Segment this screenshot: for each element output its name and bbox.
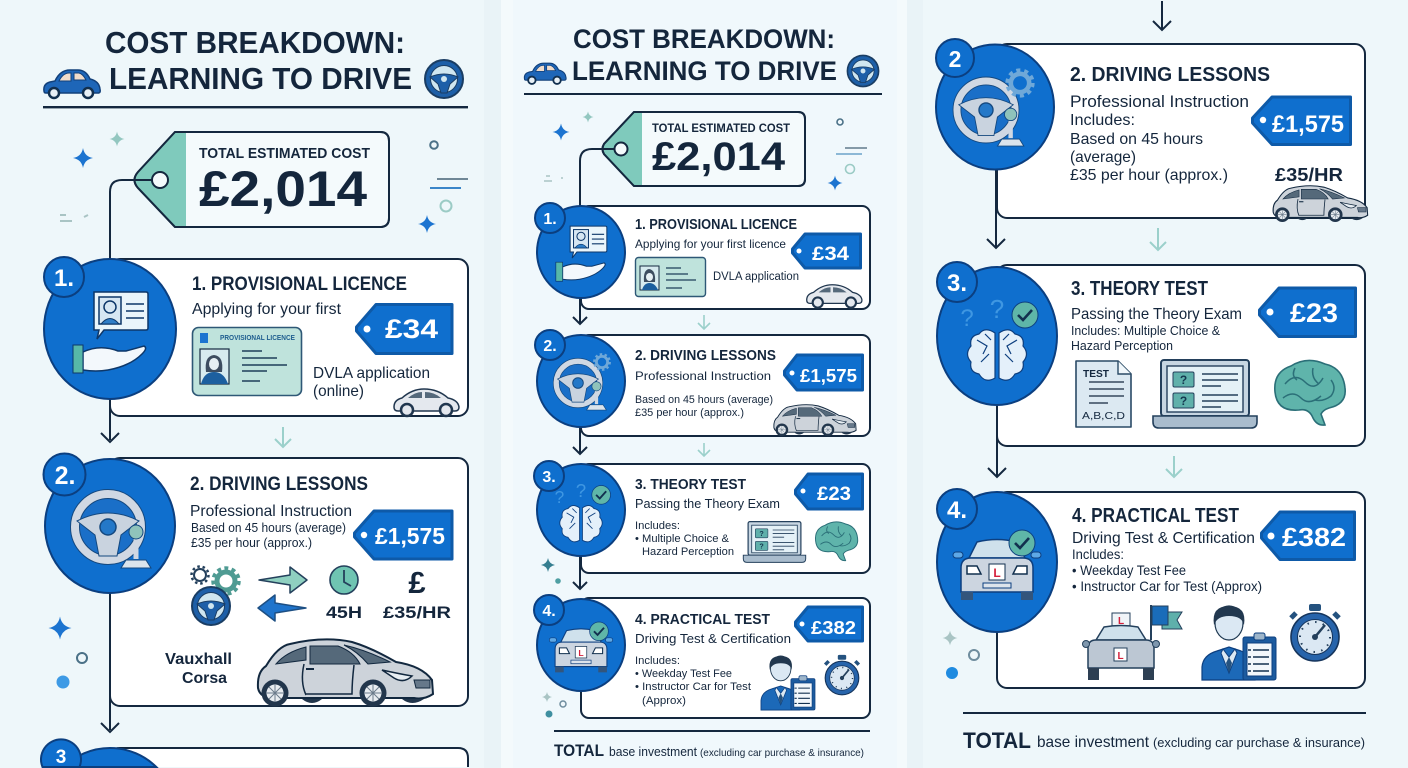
title xyxy=(105,25,412,96)
step 2 text xyxy=(635,369,773,419)
step 4 text: • Instructor Car for Test xyxy=(635,681,751,693)
step 1 heading: 1. PROVISIONAL LICENCE xyxy=(192,274,407,295)
connector arrow xyxy=(1150,228,1166,250)
number badge 1: 1. xyxy=(543,211,557,228)
step 4 text: (Approx) xyxy=(642,695,686,707)
step 3 heading: 3. THEORY TEST xyxy=(635,477,746,493)
step 3 heading: 3. THEORY TEST xyxy=(1071,278,1208,300)
footer total xyxy=(554,741,864,760)
step 3 card xyxy=(937,262,1365,477)
icon: examiner xyxy=(1202,606,1276,680)
step 3 text: Passing the Theory Exam xyxy=(635,497,780,511)
total cost tag: TOTAL ESTIMATED COST xyxy=(652,121,791,135)
step 2 price tag xyxy=(784,355,862,390)
connector arrow xyxy=(1166,456,1182,477)
step 1 card: provisional licence xyxy=(44,257,468,442)
icon: id and hand xyxy=(73,292,148,373)
number badge 2: 2. xyxy=(55,462,75,490)
total cost tag xyxy=(134,132,389,227)
icon: blue car xyxy=(524,63,566,84)
icon: clock xyxy=(330,566,358,594)
step 2 card xyxy=(936,39,1368,248)
number badge 1 xyxy=(535,203,565,233)
step 2 text: Based on 45 hours xyxy=(1070,131,1203,148)
step 2 heading: 2. DRIVING LESSONS xyxy=(635,348,776,364)
step 4 text: • Instructor Car for Test (Approx) xyxy=(1072,578,1262,594)
connector arrow xyxy=(698,443,710,456)
footer total: (excluding car purchase & insurance) xyxy=(1153,735,1365,750)
number badge 2: 2 xyxy=(949,46,961,72)
step 3 card partial xyxy=(41,739,468,768)
number badge 4 xyxy=(534,595,564,625)
step 1 price tag xyxy=(356,304,452,354)
icon: left arrow xyxy=(258,595,306,621)
icon: gears and wheel xyxy=(192,566,239,625)
title: COST BREAKDOWN: xyxy=(105,25,405,60)
icon: test paper: A,B,C,D xyxy=(1082,410,1125,422)
number badge 2 xyxy=(936,39,974,77)
step 2 heading: 2. DRIVING LESSONS xyxy=(1070,64,1270,86)
footer total: base investment xyxy=(609,744,697,759)
step 2 text: Based on 45 hours (average) xyxy=(635,394,773,406)
step 1 heading: 1. PROVISIONAL LICENCE xyxy=(635,217,797,233)
number badge 2: 2. xyxy=(543,338,557,355)
title xyxy=(572,24,837,86)
step 2 price tag: £1,575 xyxy=(375,523,445,549)
step 2 text: Professional Instruction xyxy=(635,369,771,383)
icon: stopwatch xyxy=(825,655,859,695)
step 1 note: (online) xyxy=(313,383,364,400)
illustration: hatchback xyxy=(774,405,856,436)
step 3 price tag xyxy=(1260,288,1356,336)
icon: right arrow xyxy=(259,567,307,593)
step 4 text: Includes: xyxy=(635,655,680,667)
illustration: silver hatchback xyxy=(258,639,433,706)
step 2 price tag xyxy=(1252,97,1350,144)
number badge 3 xyxy=(534,461,564,491)
step 3 text: Hazard Perception xyxy=(642,546,734,558)
illustration: hatchback xyxy=(1273,186,1368,222)
icon: laptop xyxy=(1153,360,1257,428)
total cost tag: £2,014 xyxy=(652,135,786,179)
step 1 subtitle: Applying for your first xyxy=(192,301,342,318)
icon: brain xyxy=(1275,360,1345,425)
step 2 text: Includes: xyxy=(1070,112,1135,129)
icon: steering wheel and shifter xyxy=(556,361,606,410)
label: hourly rate: £35/HR xyxy=(383,603,451,622)
step 1 price tag: £34 xyxy=(812,244,850,265)
decorative sparkles xyxy=(942,630,979,679)
step 2 text: (average) xyxy=(1070,149,1136,166)
car name xyxy=(165,651,232,687)
step 3 text: Includes: xyxy=(635,520,680,532)
icon: learner car with flag: L xyxy=(1117,651,1124,662)
step 4 text xyxy=(635,632,791,707)
footer total xyxy=(963,728,1365,753)
icon: test paper xyxy=(1076,361,1131,427)
connector arrow xyxy=(698,315,710,329)
icon: brain xyxy=(555,480,611,542)
icon: test paper: TEST xyxy=(1083,369,1109,380)
step 4 heading: 4. PRACTICAL TEST xyxy=(635,612,770,628)
licence card xyxy=(636,258,706,296)
step 2 text xyxy=(1070,92,1249,184)
number badge 2 xyxy=(44,454,86,496)
step 2 heading: 2. DRIVING LESSONS xyxy=(190,474,368,495)
icon: small car xyxy=(807,285,862,308)
step 2 card xyxy=(535,330,870,454)
step 3 text: Hazard Perception xyxy=(1071,338,1173,353)
car name: Vauxhall xyxy=(165,651,232,668)
step 2 text: £35 per hour (approx.) xyxy=(1070,167,1228,184)
icon: steering wheel xyxy=(425,60,463,98)
step 2 price tag: £1,575 xyxy=(800,366,857,386)
total cost tag xyxy=(602,112,805,186)
total cost tag: £2,014 xyxy=(199,161,367,217)
licence card: PROVISIONAL LICENCE xyxy=(220,335,295,342)
step 4 price tag: £382 xyxy=(1282,522,1346,552)
number badge 1: 1. xyxy=(54,265,74,292)
panel: left column xyxy=(41,25,468,768)
step 3 price tag xyxy=(796,474,862,509)
step 4 text: • Weekday Test Fee xyxy=(635,668,732,680)
icon: id and hand xyxy=(556,226,607,281)
icon: small car xyxy=(394,389,459,416)
icon: car with L plate xyxy=(953,530,1041,600)
step 4 heading: 4. PRACTICAL TEST xyxy=(1072,505,1239,527)
step 4 text: Includes: xyxy=(1072,546,1124,562)
step 2 card: driving lessons xyxy=(44,454,468,732)
step 3 text: Passing the Theory Exam xyxy=(1071,306,1242,323)
title: LEARNING TO DRIVE xyxy=(572,56,837,86)
step 3 price tag: £23 xyxy=(1290,298,1338,328)
step 4 card xyxy=(937,489,1365,688)
step 3 text xyxy=(1071,306,1242,353)
number badge 4 xyxy=(937,489,977,529)
step 3 text xyxy=(635,497,780,558)
total cost tag: TOTAL ESTIMATED COST xyxy=(199,145,370,162)
step 2 text: £35 per hour (approx.) xyxy=(191,535,312,550)
icon: brain xyxy=(815,522,858,561)
number badge 3: 3. xyxy=(947,270,967,297)
step 1 price tag xyxy=(792,234,860,268)
step 3 card partial: 3 xyxy=(56,747,66,768)
number badge 4: 4. xyxy=(542,603,556,620)
decorative sparkles xyxy=(48,132,468,688)
step 4 price tag: £382 xyxy=(811,618,856,638)
step 1 note: DVLA application xyxy=(313,365,430,382)
step 4 text: Driving Test & Certification xyxy=(635,632,791,646)
icon: stopwatch xyxy=(1291,604,1339,661)
number badge 3: 3. xyxy=(542,469,556,486)
step 4 card xyxy=(534,595,870,718)
licence card xyxy=(192,328,302,396)
label: 45H: 45H xyxy=(326,603,362,622)
icon: blue car xyxy=(44,70,100,98)
step 3 price tag: £23 xyxy=(817,484,851,505)
step 4 price tag xyxy=(796,607,862,641)
step 4 text: • Weekday Test Fee xyxy=(1072,562,1186,578)
step 3 text: Includes: Multiple Choice & xyxy=(1071,323,1220,338)
panel: right column xyxy=(936,1,1368,753)
step 1 subtitle: Applying for your first licence xyxy=(635,237,786,251)
panel: middle column xyxy=(524,24,882,760)
icon: car with L plate xyxy=(549,622,613,672)
step 2 text: £35 per hour (approx.) xyxy=(635,407,744,419)
step 2 text xyxy=(190,503,352,550)
icon: learner car with flag xyxy=(1082,605,1182,680)
footer total: TOTAL xyxy=(963,728,1031,753)
step 3 card xyxy=(534,461,870,589)
connector arrow xyxy=(275,427,291,447)
icon: brain xyxy=(960,294,1038,380)
step 2 price tag xyxy=(354,511,452,559)
connector arrow xyxy=(1153,1,1171,30)
car name: Corsa xyxy=(182,670,227,687)
step 4 text xyxy=(1072,530,1262,594)
title: COST BREAKDOWN: xyxy=(573,24,835,54)
step 2 text: Professional Instruction xyxy=(1070,92,1249,111)
number badge 1 xyxy=(44,257,84,297)
step 1 note xyxy=(313,365,430,400)
step 2 text: Based on 45 hours (average) xyxy=(191,520,346,535)
step 1 price tag: £34 xyxy=(385,314,438,344)
icon: examiner xyxy=(761,656,815,710)
number badge 3 xyxy=(937,262,977,302)
icon: pound sign: £ xyxy=(408,565,426,600)
icon: steering wheel and shifter xyxy=(75,494,151,568)
step 4 text: Driving Test & Certification xyxy=(1072,530,1255,547)
number badge 4: 4. xyxy=(947,497,967,524)
footer total: base investment xyxy=(1037,734,1150,751)
step 1 card xyxy=(535,203,870,324)
footer total: TOTAL xyxy=(554,741,604,760)
decorative sparkles xyxy=(541,112,867,718)
icon: laptop xyxy=(743,522,806,562)
step 4 price tag xyxy=(1262,512,1354,560)
step 2 text: Professional Instruction xyxy=(190,503,352,520)
icon: steering wheel xyxy=(847,55,879,87)
step 2 price tag: £1,575 xyxy=(1272,111,1344,138)
number badge 2 xyxy=(535,330,565,360)
title: LEARNING TO DRIVE xyxy=(109,61,412,96)
icon: learner car with flag: L xyxy=(1118,616,1124,627)
step 1 note: DVLA application xyxy=(713,271,799,283)
icon: steering wheel and shifter xyxy=(957,81,1024,146)
step 3 text: • Multiple Choice & xyxy=(635,533,730,545)
label: hourly rate: £35/HR xyxy=(1275,165,1343,185)
footer total: (excluding car purchase & insurance) xyxy=(700,747,864,759)
